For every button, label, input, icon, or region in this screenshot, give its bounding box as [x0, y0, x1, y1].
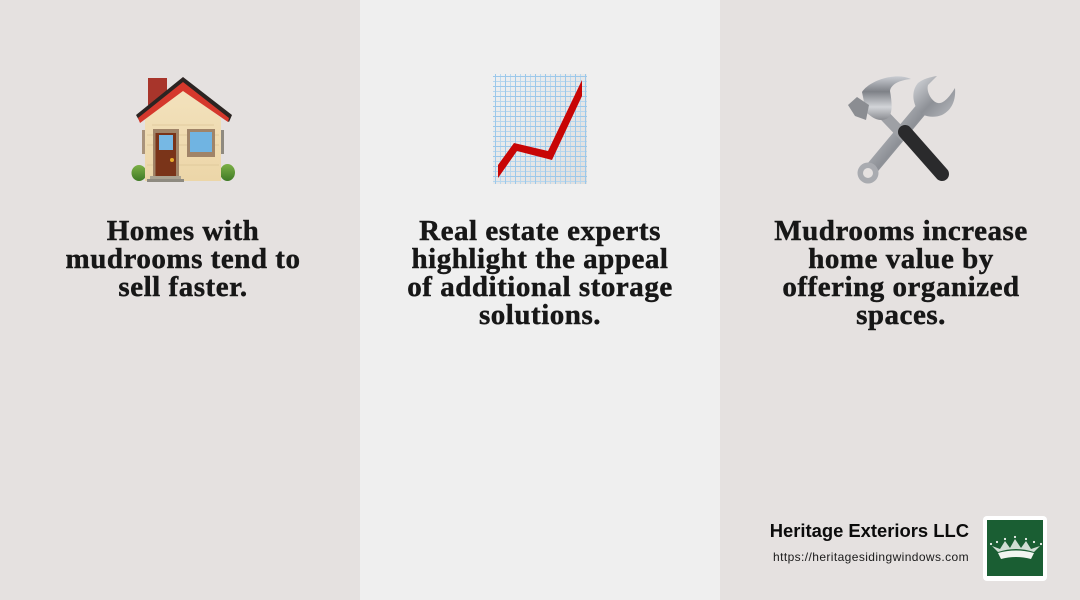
- heading: home value: home value by: [808, 243, 994, 275]
- panel: homes sell faster: [0, 0, 360, 600]
- heading: homes sell faster: sell faster.: [118, 271, 248, 303]
- heading: home value: offering organized: [782, 271, 1020, 303]
- heading: storage appeal: [407, 215, 673, 331]
- heading: homes sell faster: mudrooms tend to: [66, 243, 300, 275]
- heading: homes sell faster: Homes with: [107, 215, 259, 247]
- brand name: Heritage Exteriors LLC: [770, 520, 969, 541]
- icon: house: [132, 77, 235, 182]
- icon: crown: [990, 536, 1042, 559]
- logo badge: [983, 516, 1047, 581]
- heading: storage appeal: of additional storage: [407, 271, 673, 303]
- heading: home value: [774, 215, 1028, 331]
- icon: crossed hammer and wrench: [848, 76, 955, 184]
- panel: home value: [720, 0, 1080, 600]
- heading: home value: spaces.: [856, 299, 946, 331]
- heading: storage appeal: Real estate experts: [419, 215, 661, 247]
- icon: rising chart: [493, 74, 587, 184]
- heading: homes sell faster: [66, 215, 300, 303]
- heading: storage appeal: highlight the appeal: [412, 243, 668, 275]
- heading: home value: Mudrooms increase: [774, 215, 1028, 247]
- heading: storage appeal: solutions.: [479, 299, 601, 331]
- panel: storage appeal: [360, 0, 720, 600]
- website url: https://heritagesidingwindows.com: [773, 550, 969, 564]
- hammer: [848, 76, 942, 174]
- wrench: [858, 76, 955, 184]
